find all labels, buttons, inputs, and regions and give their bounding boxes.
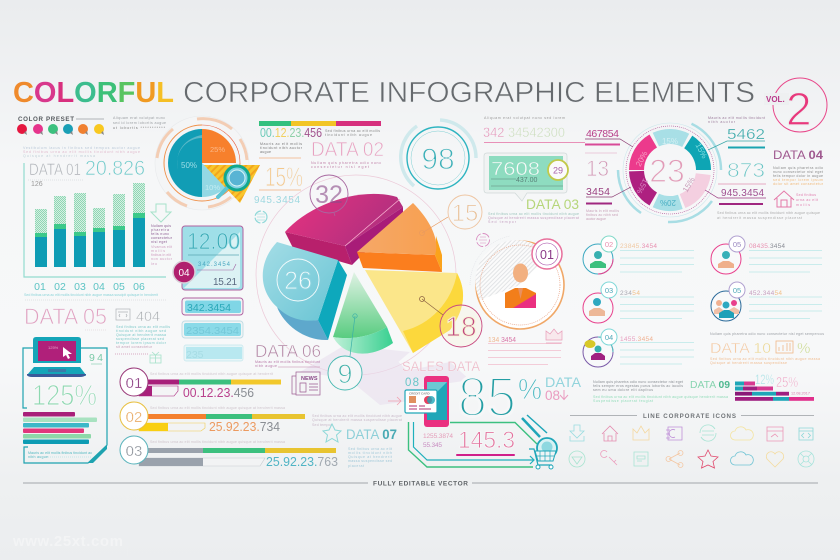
heading: data 06: nibh augue — [255, 364, 277, 368]
row 03: progress — [120, 436, 338, 469]
panel: data 07: Quisque at hendrerit massa suspendisse placerat — [312, 418, 402, 422]
watermark: www.25xt.com — [12, 533, 123, 550]
panel: data 04: sed tempor lorem ipsum — [773, 178, 823, 182]
slice: blue 26 — [263, 242, 347, 340]
slice: green 9 — [333, 272, 393, 354]
slice: magenta 32 — [285, 194, 403, 265]
person row 02 — [583, 236, 694, 274]
icon: news: NEWS — [301, 376, 318, 382]
person row 05 — [711, 236, 822, 274]
panel: data 02: Sed finibus urna ac elit mollis — [325, 129, 380, 133]
row 01: progress — [120, 368, 281, 400]
value: 15 percent: 15% — [265, 162, 303, 192]
donut labels right: 873 — [727, 160, 765, 182]
chart: 23 segmented donut: 15% — [693, 142, 709, 160]
callout: 15 — [420, 195, 482, 236]
panel: data 01 bar chart: Sed finibus urna ac elit mollis tincidunt nibh augue massa suscipit quisque in hendrerit — [24, 293, 158, 297]
panel: data 09: Suspendisse placerat feugiat — [593, 399, 653, 403]
heading: data 01: DATA 01 — [29, 160, 81, 179]
panel: 12.00 value card: 12.00 — [187, 228, 240, 254]
slice: yellow 18 — [365, 270, 463, 353]
heading: data 06: DATA 06 — [255, 341, 321, 361]
panel: data 07 — [312, 414, 402, 468]
person row 05: 08435.3454 — [749, 243, 785, 250]
panel: data 03: Sed tempor — [488, 220, 517, 224]
donut labels left: auctor augue — [586, 217, 606, 221]
icon: browser — [767, 427, 783, 441]
panel: 12.00 value card: 342.3454 — [198, 262, 231, 268]
donut labels right: Mauris ac elit mollis tincidunt — [708, 116, 765, 120]
icon: gift — [150, 352, 161, 363]
panel: data 04: mollis — [796, 203, 810, 207]
bar labels: 02 — [54, 281, 66, 293]
bar labels: 05 — [113, 281, 125, 293]
icon: chart box — [776, 341, 793, 353]
panel: data 02: augue — [260, 150, 271, 154]
panel: data 10: Sed finibus urna ac elit mollis tincidunt nibh augue massa — [710, 357, 820, 361]
segment 20 bottom — [653, 194, 683, 211]
panel: data 02 — [254, 121, 384, 206]
row 03: progress: 25.92.23.763 — [266, 455, 338, 469]
segment 20 — [629, 134, 657, 170]
icon: house — [774, 191, 794, 207]
chart: 23 segmented donut — [618, 123, 721, 222]
chart: pie 50 25 10 — [155, 116, 249, 210]
segment 15 purple — [629, 171, 657, 206]
icon: person tan — [589, 298, 605, 316]
panel: data 05: tempor lorem ipsum dolor — [116, 341, 167, 345]
value: 125 percent: 125% — [32, 380, 97, 412]
badge: 03 — [120, 436, 148, 464]
panel: sales data — [388, 359, 581, 469]
icon: credit card — [405, 390, 437, 413]
panel: data 10: Quisque at hendrerit massa suspendisse — [710, 361, 787, 365]
panel: data 05: suspendisse placerat sed — [116, 337, 164, 341]
icon: magnifier — [218, 166, 249, 197]
callout: 26: 26 — [284, 267, 312, 295]
path lines — [408, 415, 547, 467]
person row 04 — [583, 329, 694, 367]
panel: data 09: sem eu uma dolore elit dapibus — [593, 388, 653, 392]
donut labels right: 945.3454 — [721, 188, 764, 199]
arrow — [388, 397, 401, 405]
row 03: progress: Sed finibus urna ac elit mollis tincidunt nibh augue quisque at hendrerit massa — [150, 440, 285, 444]
callout: pulled out yellow slice — [204, 165, 260, 203]
horizontal bars — [23, 412, 97, 444]
callout: 15: 15 — [452, 200, 478, 227]
text block: arrow note: leo — [151, 262, 157, 266]
panel: data 10: Nullam quis pharetra odio nunc consectetur nisl eget sempercus — [710, 332, 824, 336]
person row 04: 1455.3454 — [620, 336, 653, 343]
badge: 01: 01 — [540, 248, 554, 262]
icon: down arrow — [151, 204, 171, 222]
panel: data 07: Sed finibus urna ac elit — [348, 447, 392, 451]
chart: 23 segmented donut: 15% — [662, 137, 678, 146]
heading: data 06: Mauris ac elit mollis finibus tincidunt — [255, 360, 320, 364]
icon: download — [570, 425, 584, 441]
chat bubble — [484, 153, 567, 201]
bar labels: 06 — [133, 281, 145, 293]
icon: group of people — [714, 300, 739, 318]
chart: pie 50 25 10: 25% — [210, 145, 225, 154]
icon: cloud up — [730, 427, 753, 440]
icon: map — [634, 452, 648, 466]
badge: 02 — [120, 402, 148, 430]
text block: arrow note: Nullam quis — [151, 224, 171, 228]
panel: data 09: Sed finibus urna ac elit mollis tincidunt nibh augue quisque hendrerit massa — [593, 395, 728, 399]
callout: 32 — [310, 175, 348, 216]
panel: data 07: mollis tincidunt nibh — [348, 451, 392, 455]
icon: home — [602, 426, 618, 441]
panel: data 05: DATA 05 — [24, 304, 107, 329]
label: data 08: 08 — [545, 388, 560, 403]
vol 2 badge: VOL. — [766, 95, 785, 104]
badge: 05 group: 05 — [733, 286, 741, 295]
panel: data 05: 404 — [136, 308, 160, 324]
panel: data 02: tincidunt nibh augue — [325, 133, 372, 137]
slice label: 50% — [181, 161, 197, 170]
pie shadow — [300, 345, 470, 405]
stat field: 235 — [184, 345, 243, 361]
panel: data 02: consectetur nisl eget — [311, 165, 369, 169]
text block: arrow note: nisl eget — [151, 240, 167, 244]
badge: 01 — [120, 368, 148, 396]
color preset — [17, 116, 166, 135]
panel: laptop 125 percent: nibh augue — [28, 455, 48, 459]
panel: data 04: urna ac elit — [796, 198, 818, 202]
color preset: COLOR PRESET — [18, 116, 74, 123]
panel: data 03: 342 34542300 — [483, 124, 565, 140]
heading: line corporate icons: LINE CORPORATE ICONS — [643, 413, 736, 420]
row 01: progress: Sed finibus urna ac elit mollis tincidunt nibh augue quisque at hendrerit — [150, 372, 273, 376]
panel: data 04: felis tempor dolor in augue — [773, 174, 823, 178]
segment 15 pale — [680, 173, 711, 208]
icon: shopping cart — [529, 438, 557, 469]
row 02: progress — [120, 402, 305, 434]
icon: diamond badge — [569, 451, 585, 467]
callout: 9 — [328, 314, 362, 390]
panel: sales data: 1255.3874 — [423, 433, 453, 440]
text block: arrow note: Vivamus elit — [151, 245, 172, 249]
panel: sales data: 08 — [405, 377, 419, 389]
icon: notebook — [666, 427, 682, 440]
text block: arrow note: non auctor — [151, 257, 173, 261]
panel: data 03 — [483, 116, 585, 224]
segment 15 right — [684, 136, 711, 170]
icon: person green — [590, 251, 606, 268]
stat field: 2354.3454: 2354.3454 — [186, 325, 239, 337]
progress strip — [259, 121, 381, 126]
panel: data 10: % — [797, 340, 810, 357]
panel: data 04: Nullam quis pharetra odio — [773, 166, 823, 170]
badge: 29: 29 — [553, 166, 563, 176]
swatches — [17, 124, 104, 135]
badge: 04: 04 — [605, 333, 613, 342]
panel: person 01 — [470, 234, 564, 364]
icon: crown — [633, 426, 649, 440]
panel: 12.00 value card: 15.21 — [213, 277, 237, 288]
person row 02: 23845.3454 — [620, 243, 657, 250]
title: corporate infographic elements: CORPORATE INFOGRAPHIC ELEMENTS — [183, 77, 755, 109]
icon: key — [601, 450, 617, 465]
chart: 98 gauge: 98 — [421, 143, 455, 176]
icon: lifebuoy — [798, 451, 814, 467]
panel: data 05: sit amet consectetur — [116, 345, 153, 349]
value: 145.3: 145.3 — [458, 427, 515, 454]
donut labels left: 467854 — [586, 128, 619, 140]
panel: data 05: Sed finibus urna ac elit mollis — [116, 325, 170, 329]
panel: data 09 — [593, 372, 814, 403]
value: 23: 23 — [649, 153, 685, 189]
badge: 02: 02 — [605, 240, 613, 249]
panel: data 04: dolor sit amet consectetur — [773, 182, 824, 186]
panel: data 02: tincidunt nibh auctor — [260, 146, 303, 150]
panel: data 02: Mauris ac elit mollis — [260, 142, 302, 146]
bar labels — [34, 281, 145, 293]
chat bubble: 7608 — [491, 159, 540, 179]
badge: 02: 02 — [126, 409, 142, 426]
donut labels left — [585, 128, 633, 221]
donut labels left: 3454 — [586, 186, 610, 198]
text block: arrow note: mollis — [151, 249, 165, 253]
panel: laptop 125 percent — [23, 337, 107, 463]
person row 06: 452.34454 — [749, 290, 782, 297]
icon: refresh — [700, 425, 716, 441]
icon: laptop: 125% — [48, 345, 59, 350]
icon: share — [666, 450, 683, 468]
badge: 03: 03 — [126, 443, 142, 460]
panel: data 07: Sed finibus urna ac elit mollis tincidunt nibh augue — [312, 414, 402, 418]
icon: news — [292, 372, 320, 395]
panel: data 04: DATA 04 — [773, 148, 823, 162]
panel: data 05: Quisque at hendrerit massa — [116, 333, 166, 337]
row 02: progress: 25.92.23.734 — [209, 420, 280, 434]
bar labels: 01 — [34, 281, 46, 293]
label: data 08: DATA — [545, 375, 581, 390]
panel: data 05: tincidunt nibh augue sed — [116, 329, 166, 333]
panel: person 01: 134 3454 — [488, 337, 516, 344]
panel: data 07: massa suspendisse sed — [348, 459, 392, 463]
panel: data 03: Aliquam erat volutpat nunc sed lorem — [484, 116, 565, 120]
panel: data 09: 12% — [755, 372, 774, 387]
donut labels left: Mauris in elit mollis — [586, 209, 619, 213]
panel: data 10 — [710, 332, 824, 365]
panel: data 02: 945.3454 — [254, 195, 300, 206]
icon: crown — [546, 329, 562, 343]
panel: data 09: 12.08.2017 — [791, 392, 810, 396]
text block: arrow note — [151, 224, 173, 266]
color preset: sed id lorem lobortis augue — [113, 121, 166, 125]
panel: laptop 125 percent: Mauris ac elit mollis finibus tincidunt ac — [28, 451, 92, 455]
stat field: 2354.3454 — [182, 321, 243, 338]
callout: 18 — [420, 296, 482, 347]
text block: arrow note: pharetra — [151, 228, 169, 232]
icon: person peach — [718, 251, 734, 268]
text block: arrow note: consectetur — [151, 236, 173, 240]
icon: code — [799, 428, 813, 440]
row 01: progress: 00.12.23.456 — [183, 386, 254, 400]
value: percent: % — [518, 374, 542, 406]
stat field: 342.3454: 342.3454 — [187, 302, 231, 314]
icon: recycle — [255, 211, 267, 223]
bar labels: 04 — [93, 281, 105, 293]
footer: fully editable vector: FULLY EDITABLE VECTOR — [373, 480, 468, 488]
panel: data 03: Sed finibus urna ac elit mollis tincidunt nibh augue — [488, 212, 579, 216]
row 02: progress: Sed finibus urna ac elit mollis tincidunt nibh augue quisque at hendrerit massa — [150, 406, 285, 410]
panel: data 04: Sed finibus urna ac elit mollis tincidunt nibh augue quisque — [717, 211, 820, 215]
person row 03 — [583, 282, 694, 323]
panel: data 04: Sed finibus — [796, 193, 816, 197]
icon: phone — [424, 376, 449, 427]
panel: data 01 bar chart: 126 — [31, 181, 43, 188]
icon: person — [505, 264, 536, 308]
donut labels right — [705, 116, 766, 205]
donut labels left: 13 — [586, 156, 609, 181]
badge: 05: 05 — [733, 240, 741, 249]
segment 15 top — [653, 129, 689, 147]
icon: presenter — [584, 340, 605, 360]
heading: data 03: DATA 03 — [526, 196, 579, 212]
bars — [35, 183, 145, 267]
stat field: 342.3454 — [182, 298, 243, 315]
icon: star — [698, 450, 718, 468]
vol 2 badge — [764, 78, 827, 135]
panel: data 02: Nullam quis pharetra odio nunc — [311, 161, 381, 165]
text block: arrow note: felis nunc — [151, 232, 169, 236]
badge: 04: 04 — [178, 268, 190, 279]
bar labels: 03 — [74, 281, 86, 293]
badge: 01: 01 — [126, 375, 142, 392]
chart: pie 50 25 10: 10% — [205, 183, 220, 192]
donut labels right: nibh auctor — [708, 120, 736, 124]
panel: data 01 bar chart: Sed finibus urna ac elit mollis tincidunt nibh augue — [23, 150, 140, 154]
panel: data 05 — [24, 304, 170, 363]
panel: data 10: DATA 10 — [710, 340, 771, 357]
value: 85: 85 — [458, 365, 516, 428]
text block: arrow note: finibus in elit — [151, 253, 171, 257]
donut labels left: finibus ac nibh sed — [586, 213, 618, 217]
badge: 03: 03 — [605, 286, 613, 295]
stat field: 235: 235 — [186, 349, 204, 361]
label: data 08 — [545, 375, 581, 403]
panel: sales data: SALES DATA — [402, 359, 480, 374]
panel: laptop 125 percent: 94 — [89, 352, 103, 364]
panel: data 07: Quisque at hendrerit — [348, 455, 392, 459]
callout: 32: 32 — [315, 181, 343, 209]
panel: data 04: at hendrerit massa suspendisse placerat — [717, 216, 802, 220]
person row 03: 23454 — [620, 290, 640, 297]
vol 2 badge: 2 — [786, 83, 812, 135]
person row 06 — [711, 282, 822, 321]
chart: 98 gauge — [401, 120, 476, 189]
slice: orange 15 — [357, 203, 442, 272]
panel: 12.00 value card — [173, 226, 243, 290]
3d exploded pie chart — [256, 175, 482, 405]
donut labels right: 5462 — [727, 126, 765, 143]
panel: data 04: nunc consectetur nisl eget — [773, 170, 823, 174]
callout: 18: 18 — [445, 311, 477, 342]
stacked bars — [735, 382, 814, 401]
icon: cloud — [730, 452, 753, 465]
panel: data 07: DATA 07 — [346, 427, 397, 442]
panel: data 04 — [717, 148, 824, 220]
panel: data 01 bar chart — [23, 146, 166, 300]
panel: sales data: 55.345 — [423, 442, 442, 449]
panel: data 09: felis semper eros egestas purus lobortis ac iaculis — [593, 384, 683, 388]
color preset: Aliquam erat volutpat nunc — [113, 116, 165, 120]
chat bubble: 437.00 — [516, 177, 538, 184]
chart: 23 segmented donut: 20% — [634, 150, 650, 168]
callout: 9: 9 — [337, 359, 353, 389]
panel: data 09: 25% — [776, 374, 798, 391]
icon: star — [323, 424, 341, 442]
panel: data 02: 00.12.23.456 — [260, 126, 322, 140]
panel: data 01 bar chart: Quisque at hendrerit massa — [23, 154, 95, 158]
title — [13, 77, 755, 109]
callout: 26 — [277, 259, 319, 301]
color preset: ut lobortis *********** — [113, 126, 166, 130]
panel: data 07: Sed tempor — [312, 423, 333, 427]
panel: data 07: placerat — [348, 464, 364, 468]
icon: recycle small — [476, 234, 490, 246]
chart: 23 segmented donut: 15% — [634, 177, 650, 195]
title: colorful: COLORFUL — [13, 77, 174, 109]
panel: data 09: Nullam quis pharetra odio nunc consectetur nisl eget — [593, 380, 683, 384]
icon: heart — [766, 452, 784, 467]
chart: 23 segmented donut: 20% — [660, 198, 676, 207]
value: 20.826: 20.826 — [85, 157, 145, 180]
icon: code box — [116, 309, 130, 320]
chart: 23 segmented donut: 15% — [681, 176, 697, 194]
panel: data 03: Quisque at hendrerit massa suspendisse placerat — [488, 216, 579, 220]
icon grid — [569, 425, 814, 468]
panel: data 09: DATA 09 — [690, 379, 730, 391]
panel: data 01 bar chart: Vestibulum lacus in finibus sed tempus auctor augue — [23, 146, 140, 150]
icon: credit card: CREDIT CARD — [409, 392, 430, 396]
heading: data 02: DATA 02 — [311, 139, 384, 161]
